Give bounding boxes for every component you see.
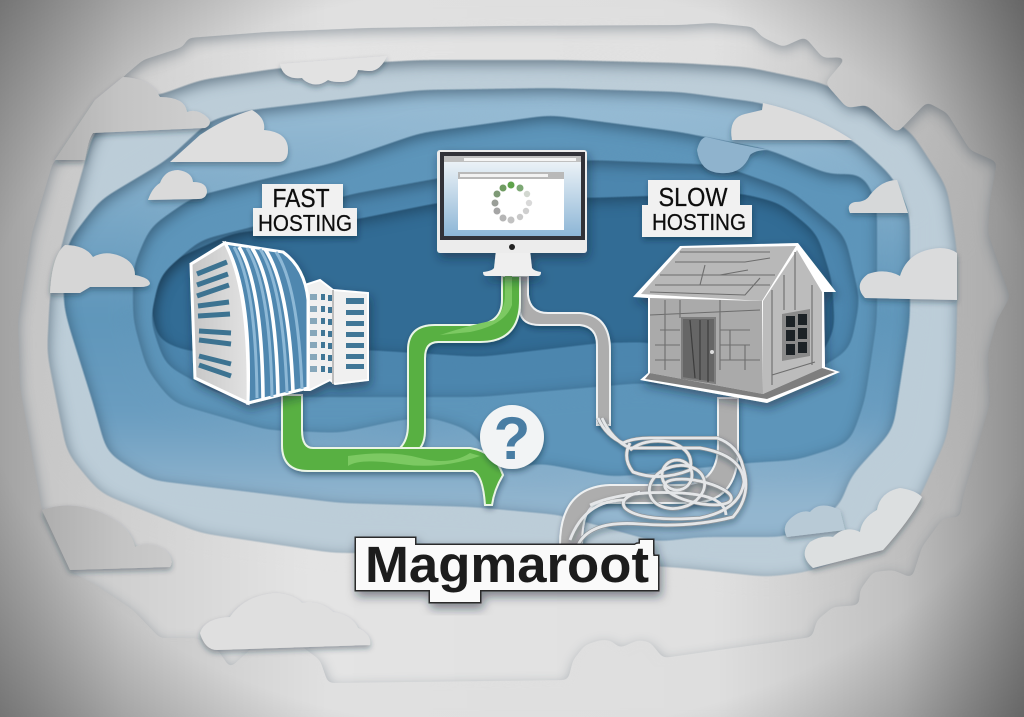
cable: tangled wires [570, 418, 746, 545]
cloud: left [50, 245, 150, 293]
cloud: bottom left [42, 505, 172, 570]
label: fast hosting: HOSTING [258, 210, 352, 236]
label: fast hosting [253, 183, 357, 236]
label: slow hosting: HOSTING [652, 209, 746, 235]
cloud: bottom center [200, 593, 370, 650]
label: slow hosting [642, 180, 752, 237]
cloud: top right blue [697, 137, 768, 173]
cloud: right [860, 248, 957, 300]
icon: office buildings [191, 243, 368, 403]
cable: gray slow route [520, 276, 738, 545]
question mark badge: ? [494, 405, 530, 472]
tower curved glass [225, 243, 308, 403]
question mark badge [480, 405, 544, 472]
window [782, 309, 810, 361]
small building [305, 280, 368, 390]
logo: Magmaroot: Magmaroot [365, 536, 649, 593]
logo: Magmaroot: Magmaroot [365, 536, 649, 593]
clouds [42, 56, 957, 650]
cloud: top left large [55, 77, 210, 160]
cloud: right small [849, 180, 908, 213]
logo: Magmaroot: Magmaroot [365, 536, 649, 593]
cloud: small left [148, 170, 207, 200]
cloud: lower right back [785, 505, 845, 537]
icon: old wooden house [633, 243, 840, 403]
cloud: top [280, 56, 387, 84]
loading spinner [492, 182, 532, 224]
label: slow hosting: SLOW [658, 182, 728, 212]
cloud: top right white [731, 103, 852, 140]
door [682, 318, 715, 383]
tower solid face [191, 243, 248, 403]
cloud: upper left [170, 110, 288, 162]
cloud: lower right front [805, 488, 922, 568]
cable: green fast route [282, 276, 520, 505]
icon: computer monitor [437, 150, 587, 276]
label: fast hosting: FAST [272, 183, 330, 213]
